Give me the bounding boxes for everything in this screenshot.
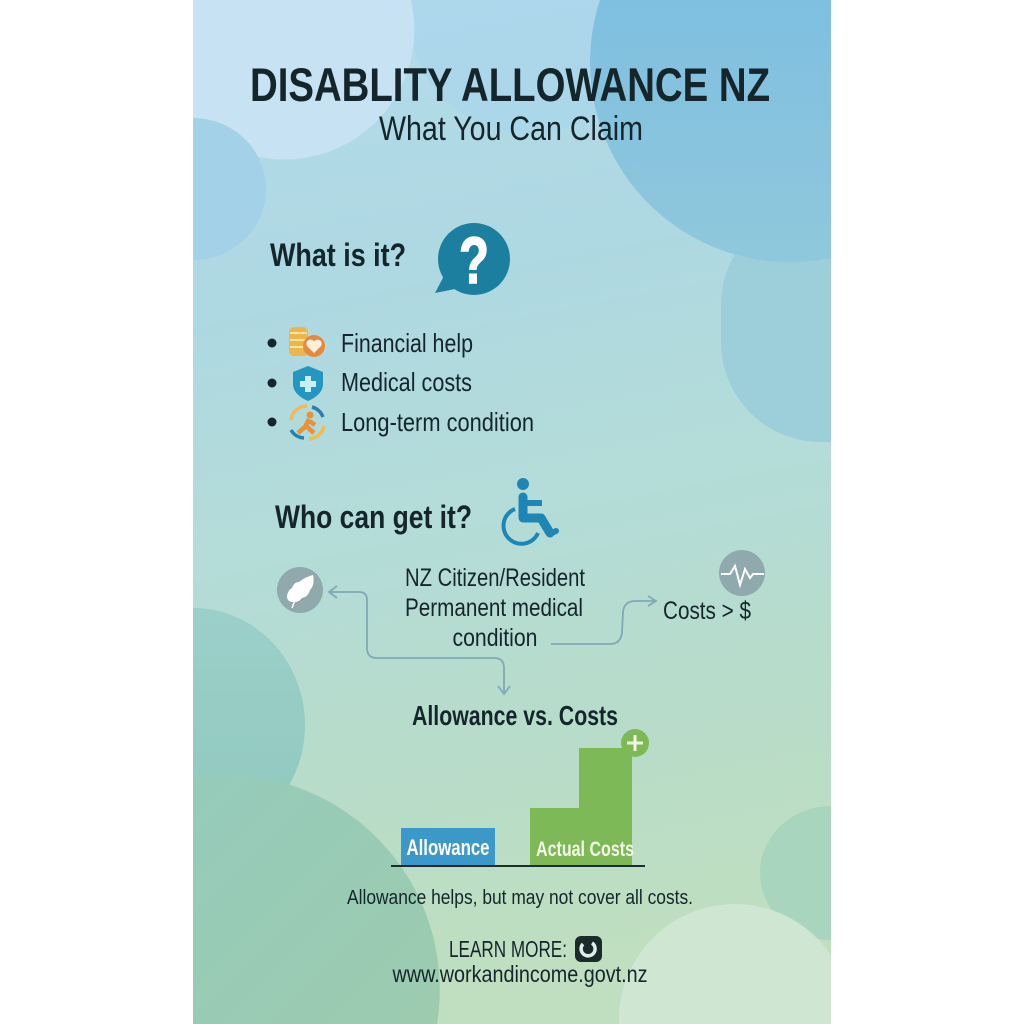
icon: plus badge (621, 729, 649, 757)
icon: question speech bubble: ? (459, 223, 489, 297)
arrow: to fern and allowance (329, 586, 510, 694)
text: medical costs: Medical costs (341, 367, 472, 397)
text: eligibility: NZ Citizen/Resident (405, 564, 585, 592)
bullets (268, 338, 276, 426)
heading: who can get it: Who can get it? (275, 499, 472, 535)
title: DISABLITY ALLOWANCE NZ (250, 58, 770, 111)
background panel (193, 0, 831, 1024)
text: eligibility: condition (452, 624, 538, 652)
list: what is it (268, 327, 534, 439)
bar: allowance: Allowance (406, 835, 490, 860)
icon: heartbeat badge (719, 550, 765, 596)
chart baseline (391, 865, 645, 867)
text: caption: Allowance helps, but may not cover all costs. (347, 886, 693, 909)
icon: walking person with cycle arrows (291, 406, 324, 439)
bar: actual costs: Actual Costs (536, 838, 634, 861)
icon: wheelchair (504, 478, 556, 544)
text: eligibility: Permanent medical (405, 594, 583, 622)
text: financial help: Financial help (341, 328, 473, 358)
subtitle: What You Can Claim (379, 110, 643, 148)
icon: medical shield (293, 366, 323, 401)
heading: allowance vs costs: Allowance vs. Costs (412, 700, 618, 731)
icon: fern badge (277, 567, 323, 613)
icon: coins and heart (289, 327, 325, 357)
heading: what is it: What is it? (270, 237, 406, 273)
bar: allowance (401, 828, 495, 865)
icon: question speech bubble (435, 223, 510, 297)
bar: actual costs (530, 748, 634, 865)
text: costs greater than: Costs > $ (663, 597, 751, 625)
arrow: to costs (551, 596, 656, 644)
text: eligibility (405, 564, 585, 652)
text: learn more: LEARN MORE: (449, 936, 567, 962)
text: website: www.workandincome.govt.nz (392, 961, 648, 987)
text: long-term condition: Long-term condition (341, 407, 534, 437)
bar chart (391, 729, 649, 867)
icon: link badge (575, 936, 602, 962)
